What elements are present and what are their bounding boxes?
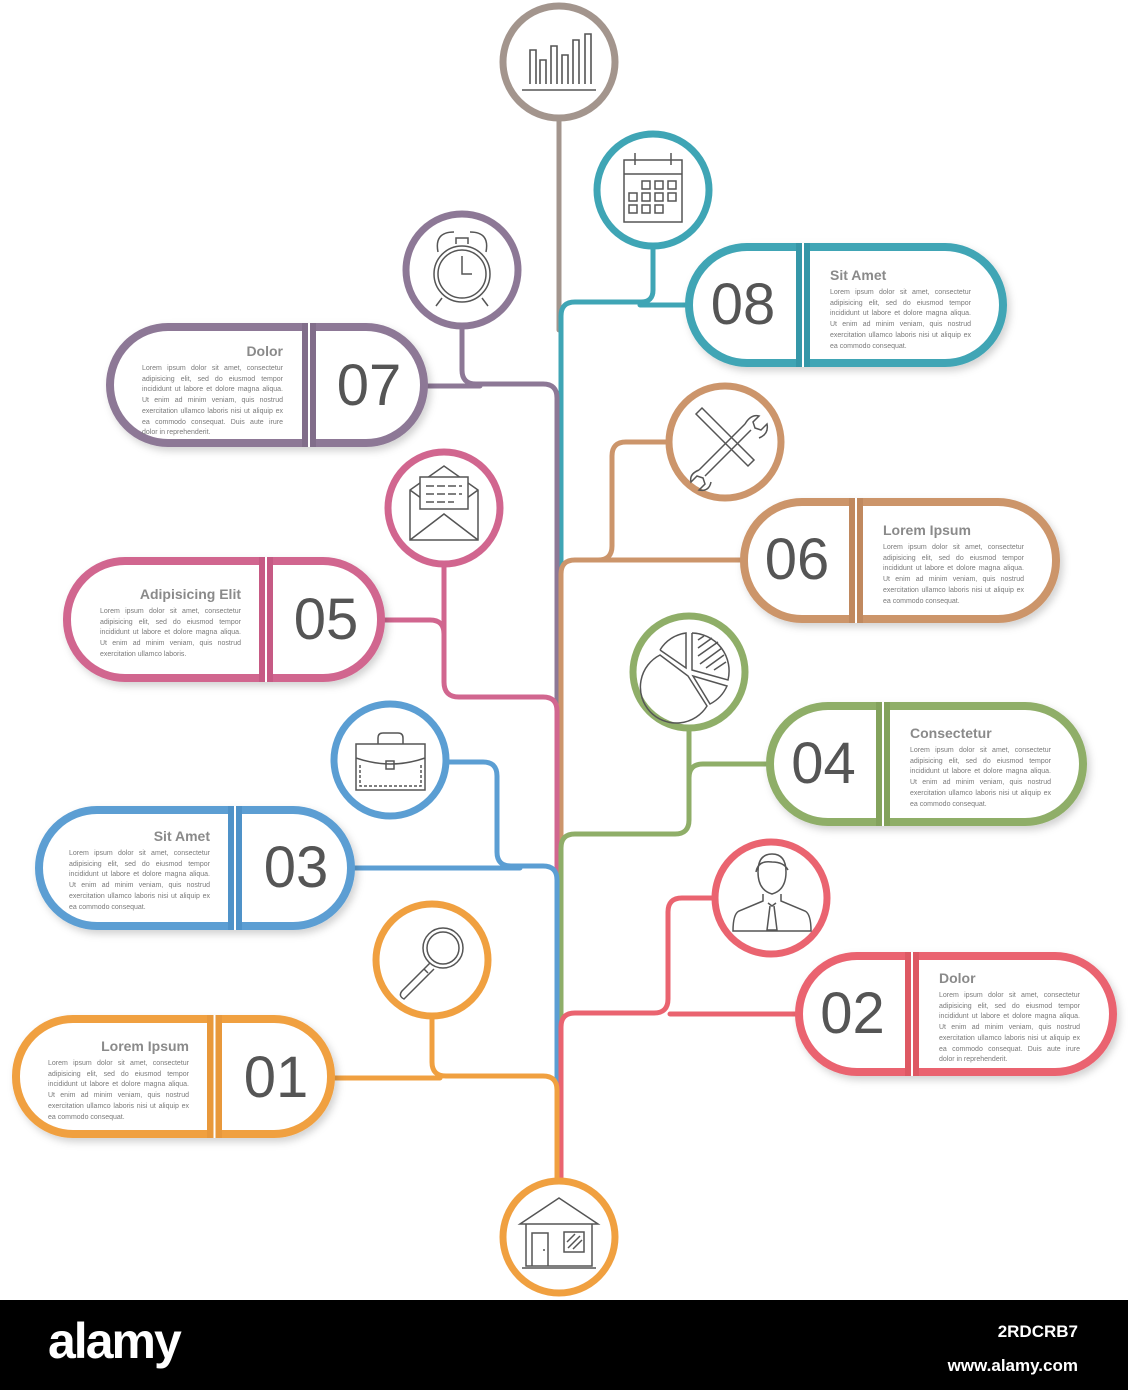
text: card 07: Ut enim ad minim veniam, quis nostrud: [142, 397, 283, 404]
text: card 02: adipisicing elit, sed do eiusmod tempor: [939, 1003, 1080, 1010]
text: card 08: Ut enim ad minim veniam, quis nostrud: [830, 321, 971, 328]
icon circle: alarm clock: [406, 214, 518, 326]
text: card 01: exercitation ullamco laboris nisi ut aliquip ex: [48, 1103, 189, 1110]
icon circle: home: [503, 1181, 615, 1293]
icon circle: person: [715, 842, 827, 954]
text: card 03: Lorem ipsum dolor sit amet, consectetur: [69, 850, 210, 857]
icon circle: tools: [669, 386, 781, 498]
text: card 01: incididunt ut labore et dolore magna aliqua.: [48, 1081, 189, 1088]
text: card 08: adipisicing elit, sed do eiusmod tempor: [830, 300, 971, 307]
text: card 04: [910, 725, 1051, 808]
text: card 01: Lorem Ipsum: [101, 1038, 189, 1054]
card 04: [770, 702, 1083, 826]
text: card 02: Ut enim ad minim veniam, quis nostrud: [939, 1024, 1080, 1031]
text: card 05: Lorem ipsum dolor sit amet, consectetur: [100, 608, 241, 615]
text: card 07: adipisicing elit, sed do eiusmod tempor: [142, 376, 283, 383]
text: card 08: Sit Amet: [830, 267, 886, 283]
number 07: 07: [337, 353, 401, 418]
card 07: [110, 323, 424, 447]
text: card 06: [883, 522, 1024, 605]
text: card 01: Ut enim ad minim veniam, quis nostrud: [48, 1092, 189, 1099]
number 06: 06: [765, 527, 829, 592]
card 03: [39, 806, 351, 930]
text: card 04: ea commodo consequat.: [910, 801, 987, 808]
text: card 08: incididunt ut labore et dolore magna aliqua.: [830, 310, 971, 317]
card 05: [67, 557, 381, 682]
text: card 02: [939, 970, 1080, 1063]
connector lines: [335, 120, 795, 1180]
text: card 04: Ut enim ad minim veniam, quis nostrud: [910, 779, 1051, 786]
text: card 03: ea commodo consequat.: [69, 904, 146, 911]
text: card 07: ea commodo consequat. Duis aute irure: [142, 419, 283, 426]
icon circle: mail: [388, 452, 500, 564]
number 04: 04: [791, 731, 856, 796]
text: card 08: exercitation ullamco laboris nisi ut aliquip ex: [830, 332, 971, 339]
text: card 03: Ut enim ad minim veniam, quis nostrud: [69, 882, 210, 889]
text: card 05: [100, 586, 241, 658]
logo text: alamy: [48, 1313, 180, 1369]
text: card 04: adipisicing elit, sed do eiusmod tempor: [910, 758, 1051, 765]
text: card 06: ea commodo consequat.: [883, 598, 960, 605]
text: card 06: exercitation ullamco laboris nisi ut aliquip ex: [883, 587, 1024, 594]
text: card 03: incididunt ut labore et dolore magna aliqua.: [69, 871, 210, 878]
text: card 01: ea commodo consequat.: [48, 1114, 125, 1121]
text: card 08: Lorem ipsum dolor sit amet, consectetur: [830, 289, 971, 296]
text: card 06: Lorem Ipsum: [883, 522, 971, 538]
icon circle: pie chart: [633, 616, 745, 728]
text: card 04: exercitation ullamco laboris nisi ut aliquip ex: [910, 790, 1051, 797]
icon circle: calendar: [597, 134, 709, 246]
text: card 03: Sit Amet: [154, 828, 210, 844]
text: card 05: incididunt ut labore et dolore magna aliqua.: [100, 629, 241, 636]
text: card 06: Lorem ipsum dolor sit amet, consectetur: [883, 544, 1024, 551]
text: card 05: exercitation ullamco laboris.: [100, 651, 186, 658]
text: card 04: incididunt ut labore et dolore magna aliqua.: [910, 768, 1051, 775]
text: card 07: exercitation ullamco laboris nisi ut aliquip ex: [142, 408, 283, 415]
text: card 06: adipisicing elit, sed do eiusmod tempor: [883, 555, 1024, 562]
text: card 07: incididunt ut labore et dolore magna aliqua.: [142, 386, 283, 393]
text: card 03: [69, 828, 210, 911]
website: www.alamy.com: [948, 1356, 1078, 1375]
number 02: 02: [820, 981, 885, 1046]
text: card 02: Lorem ipsum dolor sit amet, consectetur: [939, 992, 1080, 999]
card 02: [799, 952, 1113, 1076]
text: card 05: Ut enim ad minim veniam, quis nostrud: [100, 640, 241, 647]
icon circle: briefcase: [334, 704, 446, 816]
text: card 01: adipisicing elit, sed do eiusmod tempor: [48, 1071, 189, 1078]
text: card 07: dolor in reprehenderit.: [142, 429, 210, 436]
text: card 05: adipisicing elit, sed do eiusmod tempor: [100, 619, 241, 626]
text: card 02: dolor in reprehenderit.: [939, 1056, 1008, 1063]
text: card 02: ea commodo consequat. Duis aute irure: [939, 1046, 1080, 1053]
text: card 01: Lorem ipsum dolor sit amet, consectetur: [48, 1060, 189, 1067]
watermark bar: [0, 1300, 1128, 1390]
text: card 08: [830, 267, 971, 350]
text: card 03: exercitation ullamco laboris nisi ut aliquip ex: [69, 893, 210, 900]
number 01: 01: [244, 1045, 308, 1110]
text: card 01: [48, 1038, 189, 1121]
text: card 03: adipisicing elit, sed do eiusmod tempor: [69, 861, 210, 868]
text: card 07: Lorem ipsum dolor sit amet, consectetur: [142, 365, 283, 372]
text: card 05: Adipisicing Elit: [140, 586, 241, 602]
text: card 04: Lorem ipsum dolor sit amet, consectetur: [910, 747, 1051, 754]
number 03: 03: [264, 835, 328, 900]
icon circle: bar chart (top): [503, 6, 615, 118]
icon circle: magnifier: [376, 904, 488, 1016]
number 05: 05: [294, 587, 358, 652]
card 01: [16, 1015, 331, 1138]
text: card 06: Ut enim ad minim veniam, quis nostrud: [883, 576, 1024, 583]
card 06: [744, 498, 1056, 623]
card 08: [689, 243, 1003, 367]
text: card 07: [142, 343, 283, 436]
text: card 06: incididunt ut labore et dolore magna aliqua.: [883, 565, 1024, 572]
text: card 04: Consectetur: [910, 725, 992, 741]
text: card 02: Dolor: [939, 970, 976, 986]
text: card 07: Dolor: [246, 343, 283, 359]
text: card 02: incididunt ut labore et dolore magna aliqua.: [939, 1013, 1080, 1020]
image id: 2RDCRB7: [998, 1322, 1078, 1341]
text: card 02: exercitation ullamco laboris nisi ut aliquip ex: [939, 1035, 1080, 1042]
number 08: 08: [711, 272, 775, 337]
text: card 08: ea commodo consequat.: [830, 343, 907, 350]
